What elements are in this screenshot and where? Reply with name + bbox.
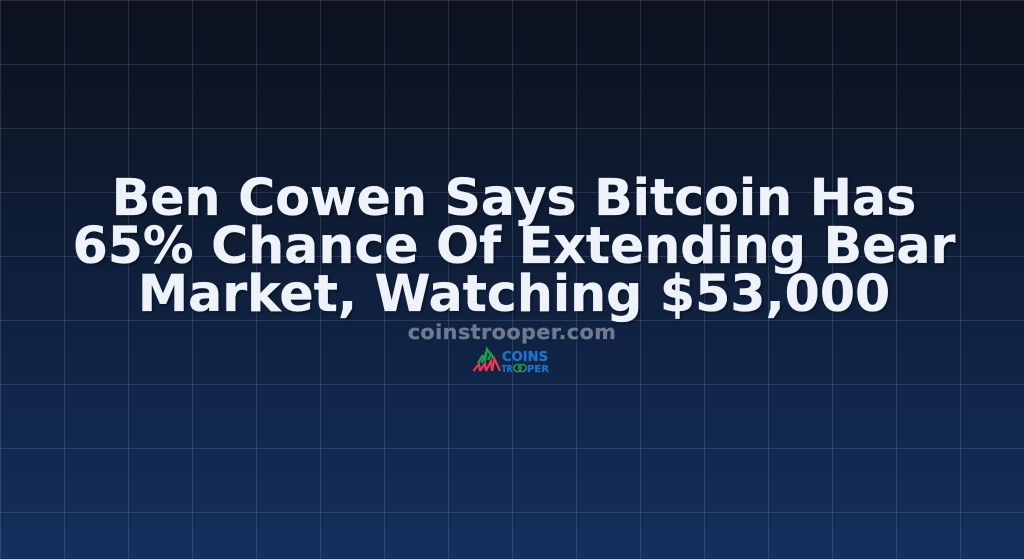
title: Ben Cowen Says Bitcoin Has bbox=[112, 168, 916, 227]
title: Market, Watching $53,000 bbox=[138, 264, 890, 323]
logo: Coins Trooper bbox=[472, 346, 549, 374]
title: 65% Chance Of Extending Bear bbox=[73, 216, 955, 275]
title bbox=[73, 168, 958, 324]
site url: coinstrooper.com bbox=[408, 320, 616, 344]
logo: Coins Trooper: COINS bbox=[502, 350, 548, 365]
